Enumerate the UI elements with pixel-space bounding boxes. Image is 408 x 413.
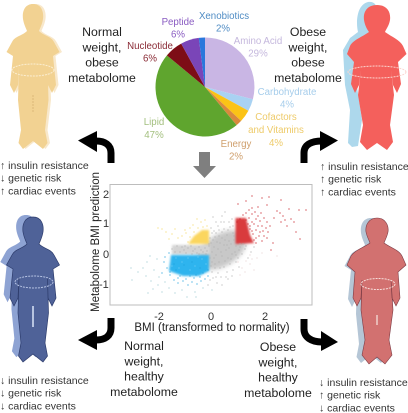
red density — [236, 218, 254, 244]
effects: obese weight, obese metabolome: ↑ cardiac events — [320, 186, 396, 198]
figure: normal weight, healthy metabolome — [0, 215, 59, 362]
arrow: pie to scatter — [193, 152, 216, 178]
label: cofactors and vitamins: Cofactors — [255, 112, 297, 123]
effects: obese weight, healthy metabolome: ↓ insulin resistance — [319, 377, 408, 389]
heading: normal weight, healthy metabolome: weight, — [124, 354, 163, 368]
label: carbohydrate: 4% — [280, 100, 294, 110]
x axis title: BMI (transformed to normality) — [134, 322, 290, 334]
effects: normal weight, healthy metabolome: ↓ genetic risk — [0, 388, 62, 400]
arrow: top left — [78, 131, 111, 163]
label: lipid: Lipid — [144, 117, 164, 128]
effects: obese weight, obese metabolome: ↑ insulin resistance — [320, 161, 408, 173]
heading: normal weight, healthy metabolome: Normal — [124, 339, 164, 353]
label: carbohydrate: Carbohydrate — [258, 87, 316, 98]
faint pink points — [238, 253, 277, 275]
heading: normal weight, healthy metabolome: healthy — [124, 370, 165, 384]
y axis title: Metabolome BMI prediction — [90, 172, 102, 312]
heading: obese weight, obese metabolome: metabolome — [274, 71, 342, 85]
label: peptide: 6% — [171, 30, 185, 40]
scatter plot — [90, 172, 312, 334]
label: energy: 2% — [229, 152, 243, 162]
figure: normal weight, obese metabolome — [6, 4, 62, 149]
figure: obese weight, obese metabolome — [343, 2, 406, 150]
tick label 1: 1 — [103, 218, 109, 230]
label: peptide: Peptide — [162, 17, 194, 28]
heading: obese weight, obese metabolome: Obese — [290, 25, 326, 39]
heading: normal weight, obese metabolome: Normal — [82, 25, 122, 39]
effects: obese weight, healthy metabolome: ↑ genetic risk — [319, 390, 381, 402]
pie chart: metabolite classes — [156, 38, 254, 136]
label: nucleotide: Nucleotide — [127, 41, 173, 52]
x tick label 0: 0 — [208, 311, 214, 323]
light marks inside blue cluster — [172, 257, 206, 270]
effects: normal weight, healthy metabolome: ↓ cardiac events — [0, 400, 76, 412]
x tick label -2: -2 — [154, 311, 164, 323]
heading: obese weight, healthy metabolome: weight, — [258, 355, 297, 369]
pie labels — [127, 11, 316, 162]
effects: normal weight, healthy metabolome: ↓ insulin resistance — [0, 375, 89, 387]
label: xenobiotics: Xenobiotics — [199, 11, 249, 22]
effects: normal weight, obese metabolome: ↑ cardiac events — [0, 185, 76, 197]
effects: normal weight, obese metabolome: ↓ genetic risk — [0, 173, 62, 185]
figure: obese weight, healthy metabolome — [344, 218, 406, 364]
blue density — [169, 255, 209, 276]
yellow points — [158, 219, 207, 242]
heading: obese weight, obese metabolome: weight, — [288, 40, 327, 54]
heading: obese weight, obese metabolome: obese — [291, 56, 325, 70]
heading: normal weight, obese metabolome: metabolome — [68, 71, 136, 85]
plot frame — [110, 184, 312, 305]
effects: obese weight, obese metabolome: ↑ genetic risk — [320, 174, 382, 186]
grey band behind yellow and blue — [172, 245, 210, 254]
tick label 0: 0 — [103, 249, 109, 261]
grey density cloud — [191, 222, 253, 278]
arrow: bottom left — [78, 318, 111, 350]
heading: obese weight, healthy metabolome: Obese — [260, 340, 296, 354]
label: amino acid: Amino Acid — [234, 36, 282, 47]
arrow: bottom right — [304, 319, 338, 351]
faded teal outliers — [131, 256, 212, 297]
heading: obese weight, healthy metabolome: healthy — [258, 371, 299, 385]
heading: normal weight, healthy metabolome: metabolome — [110, 385, 178, 399]
blue points — [162, 253, 208, 285]
heading: obese weight, healthy metabolome: metabolome — [244, 386, 312, 400]
label: cofactors and vitamins: 4% — [269, 138, 283, 149]
heading: normal weight, obese metabolome: weight, — [82, 40, 121, 54]
yellow density — [188, 230, 209, 244]
effects: normal weight, obese metabolome: ↑ insulin resistance — [0, 160, 89, 172]
y axis tick label 2: 2 — [103, 189, 109, 201]
label: xenobiotics: 2% — [216, 24, 230, 34]
label: energy: Energy — [221, 139, 251, 150]
label: cofactors and vitamins: and Vitamins — [248, 125, 304, 136]
label: amino acid: 29% — [248, 48, 268, 60]
label: nucleotide: 6% — [143, 54, 157, 64]
heading: normal weight, obese metabolome: obese — [85, 56, 119, 70]
grey points — [172, 212, 254, 285]
tick label -1: -1 — [99, 279, 109, 291]
label: lipid: 47% — [144, 130, 164, 141]
arrow: top right — [304, 131, 338, 163]
red points — [237, 196, 306, 250]
x tick label 2: 2 — [262, 311, 268, 323]
